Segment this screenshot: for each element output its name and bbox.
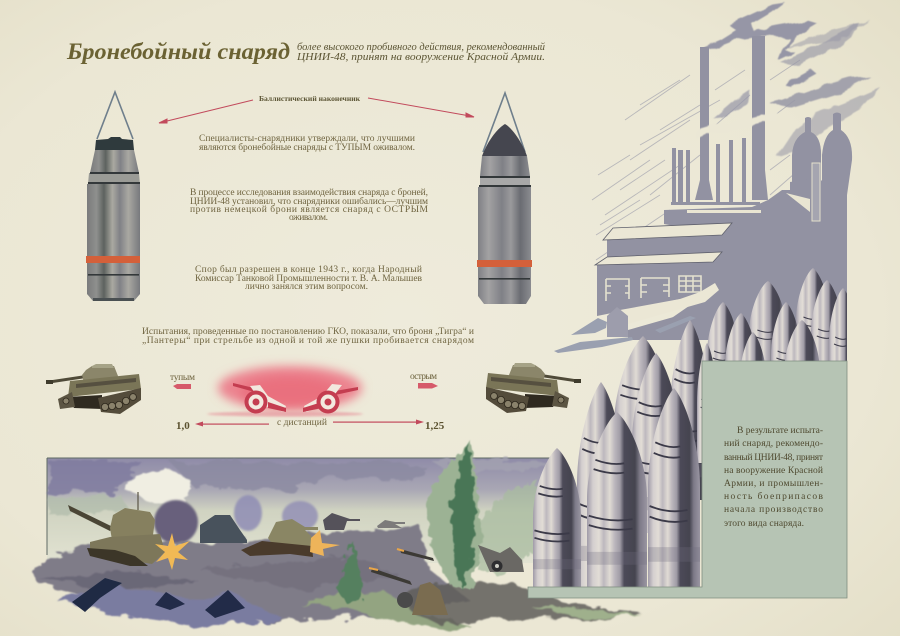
result text: этого вида снаряда. [724, 519, 804, 529]
smoke plume [703, 2, 880, 157]
clouds [48, 460, 552, 516]
copper driving band, sharp shell [477, 260, 532, 267]
text block: dispute resolved: Спор был разрешен в конце 1943 г., когда Народный [195, 264, 422, 275]
ground [30, 525, 470, 622]
text block: trials [142, 326, 474, 346]
value 1,0: 1,0 [176, 420, 190, 432]
white smoke band across chimneys [695, 112, 778, 138]
result text: В результате испыта- [737, 426, 823, 436]
label: blunt with small shell [170, 373, 195, 389]
text block: dispute resolved [195, 264, 422, 292]
red firing cloud with two guns [207, 366, 363, 416]
result text [724, 426, 824, 529]
copper driving band, blunt shell [86, 256, 140, 263]
muzzle flash 1 [155, 533, 190, 570]
right distance arrow [333, 420, 424, 424]
subtitle [296, 41, 545, 63]
left gun [233, 383, 286, 414]
lower shed [595, 252, 725, 316]
text block: trials: „Пантеры“ при стрельбе из одной и той же пушки пробивается снарядом [142, 335, 474, 346]
sloped roof strip and outbuilding [607, 283, 740, 340]
ground shadows [554, 316, 696, 353]
result text: ванный ЦНИИ-48, принят [724, 452, 824, 463]
Tiger tank in scene [68, 492, 165, 566]
ballistic cap label: Баллистический наконечник [259, 94, 361, 103]
shell: blunt nose (left) [86, 92, 140, 301]
back row shells [708, 268, 847, 361]
result panel [528, 361, 847, 598]
upper shed [603, 223, 745, 257]
value 1,25: 1,25 [425, 420, 445, 432]
subtitle: более высокого пробивного действия, рекомендованный [297, 41, 545, 53]
text block: dispute resolved: Комиссар Танковой Промышленности т. В. А. Малышев [195, 273, 422, 284]
shell stack [533, 268, 857, 587]
result text: ний снаряд, рекомендо- [724, 438, 823, 449]
label: sharp with small shell: острым [410, 372, 437, 382]
red cloud [207, 366, 363, 416]
text block: sharp nose finding: оживалом. [289, 213, 328, 223]
subtitle: ЦНИИ-48, принят на вооружение Красной Армии. [296, 51, 545, 63]
arrow to right shell [368, 98, 474, 117]
trees [338, 440, 538, 602]
text block: sharp nose finding: ЦНИИ-48 установил, что снарядники ошибались—лучшим [190, 196, 428, 207]
left Tiger tank [46, 364, 141, 414]
right gun [303, 384, 358, 414]
label: blunt with small shell: тупым [170, 373, 195, 383]
text block: blunt nose claim: являются бронебойные снаряды с ТУПЫМ оживалом. [199, 142, 415, 153]
text block: sharp nose finding [190, 187, 429, 223]
distant tanks [323, 513, 405, 530]
left distance arrow [195, 422, 269, 426]
right Tiger tank [486, 363, 581, 413]
rocks foreground [55, 578, 285, 626]
muzzle flash 2 [310, 530, 340, 556]
chimneys [672, 36, 768, 204]
distance label: с дистанций [277, 417, 327, 428]
text block: sharp nose finding: против немецкой брони является снаряд с ОСТРЫМ [190, 204, 429, 215]
foreground field gun [369, 549, 448, 615]
Panther tank [241, 519, 318, 557]
label: sharp with small shell [410, 372, 438, 388]
text block: trials: Испытания, проведенные по постановлению ГКО, показали, что броня „Тигра“ и [142, 326, 474, 337]
result text: Армии, и промышлен- [724, 479, 823, 489]
result text: ность боеприпасов [724, 491, 824, 502]
ballistic cap outline, sharp shell [483, 93, 525, 152]
smoke streaks [592, 60, 810, 260]
text block: blunt nose claim [199, 134, 415, 153]
text block: sharp nose finding: В процессе исследования взаимодействия снаряда с броней, [190, 187, 428, 198]
result text: на вооружение Красной [724, 465, 823, 476]
battle scene [30, 440, 640, 630]
front group shells [533, 320, 717, 587]
sky [47, 458, 552, 563]
title: Бронебойный снаряд [66, 39, 290, 64]
distant explosions [154, 495, 318, 544]
text block: blunt nose claim: Специалисты-снарядники утверждали, что лучшими [199, 134, 415, 144]
rear field gun [478, 545, 524, 572]
shell: sharp nose (right) [477, 93, 532, 304]
factory silhouette [640, 178, 847, 340]
green bank [300, 578, 640, 630]
green panel background [528, 361, 847, 598]
arrow to left shell [159, 100, 253, 123]
mid tank [200, 515, 247, 543]
text block: dispute resolved: лично занялся этим вопросом. [245, 282, 368, 292]
factory windows [606, 276, 701, 301]
blast furnace towers [792, 112, 852, 195]
result text: начала производство [724, 505, 823, 515]
factory [554, 2, 880, 353]
ballistic cap outline, blunt shell [97, 92, 133, 139]
